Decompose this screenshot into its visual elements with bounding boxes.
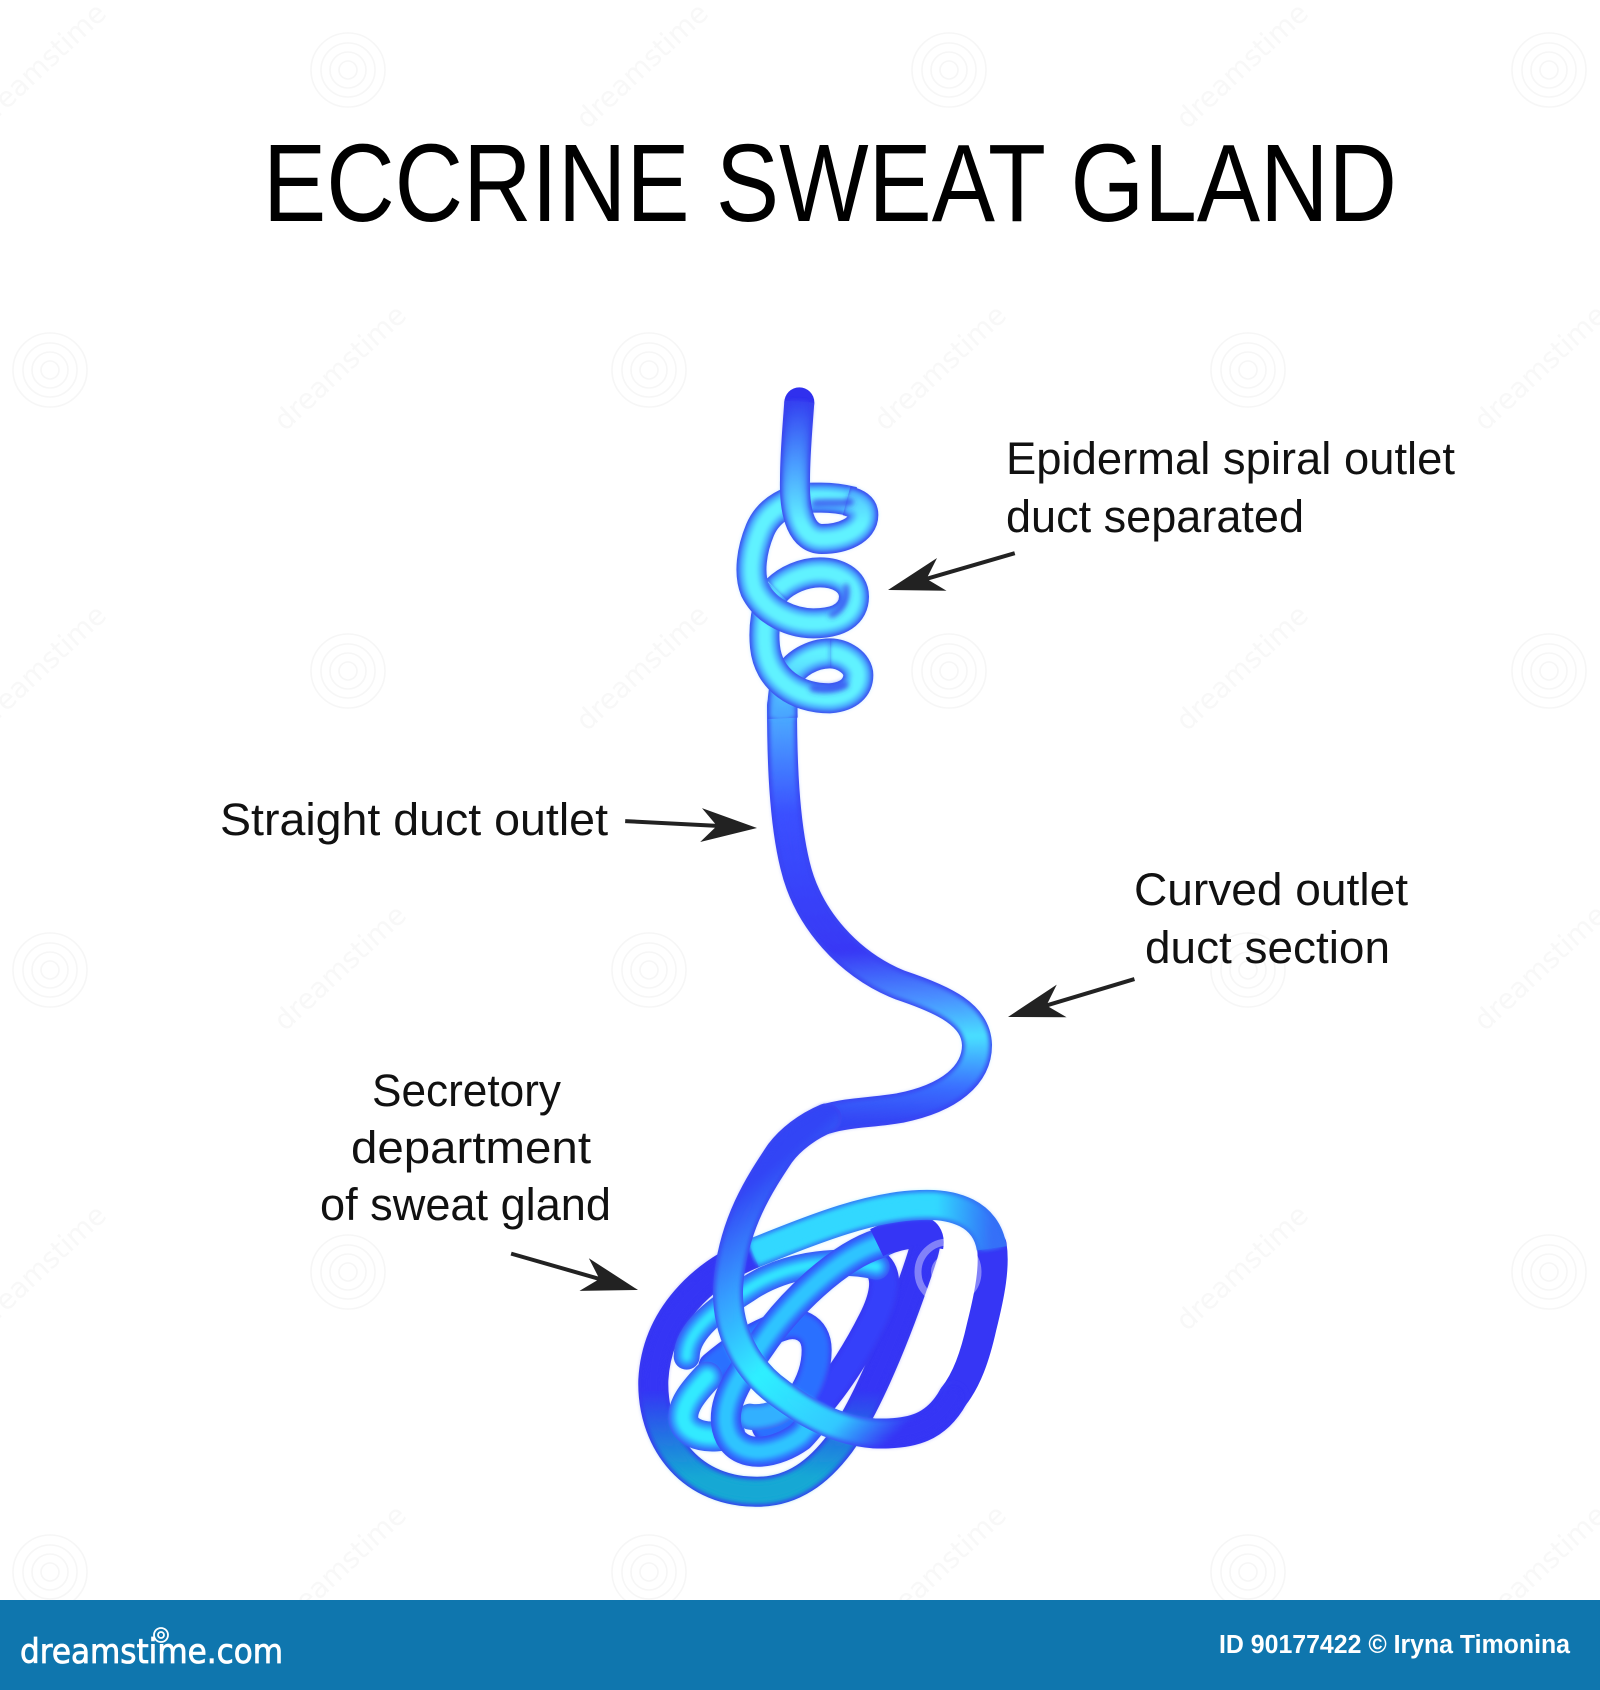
title: ECCRINE SWEAT GLAND (263, 122, 1397, 245)
sweat gland tube illustration (653, 387, 993, 1492)
top straight and first ring (784, 387, 863, 539)
arrow: to curved section (1003, 963, 1139, 1033)
watermark pattern: dreamstime (267, 898, 413, 1037)
footer credit: ID 90177422 © Iryna Timonina (1219, 1631, 1571, 1659)
right dark band (953, 1245, 993, 1397)
label: curved outlet duct section: Curved outlet (1134, 864, 1409, 915)
arrow: to straight duct (624, 804, 758, 845)
footer logo spiral (154, 1628, 168, 1642)
watermark pattern: dreamstime (867, 298, 1013, 437)
watermark pattern: dreamstime (267, 298, 413, 437)
second ring (751, 498, 854, 623)
watermark pattern: dreamstime (1169, 0, 1315, 135)
small ring (713, 1324, 817, 1427)
overlay watermark (918, 1242, 978, 1302)
label: secretory department: Secretory (372, 1065, 561, 1116)
watermark pattern: dreamstime (1169, 598, 1315, 737)
third ring (764, 590, 858, 698)
inner loop light left (687, 1263, 877, 1357)
label: curved outlet duct section: duct section (1145, 922, 1390, 973)
label: epidermal spiral outlet duct: Epidermal spiral outlet (1006, 433, 1455, 484)
label: secretory department: department (351, 1122, 592, 1173)
top light band (753, 1205, 992, 1253)
watermark pattern: dreamstime (569, 0, 715, 135)
footer logo text: dreamstime.com (20, 1632, 283, 1672)
main descending tube and bottom band (728, 1118, 953, 1434)
inner loop dark right (817, 1265, 884, 1407)
label: secretory department: of sweat gland (320, 1179, 611, 1230)
footer bar (0, 1600, 1600, 1690)
label: epidermal spiral outlet duct (1006, 433, 1455, 542)
secretory coil (653, 1118, 993, 1492)
straight and curved duct (782, 705, 977, 1119)
dark cap piece (877, 1230, 929, 1247)
label: secretory department (320, 1065, 611, 1230)
watermark pattern: dreamstime (867, 1498, 1013, 1637)
watermark pattern: dreamstime (569, 598, 715, 737)
epidermal spiral coil (751, 387, 863, 718)
label: straight duct outlet: Straight duct outlet (220, 794, 609, 845)
inner shading (813, 502, 850, 689)
central light tube (726, 1243, 880, 1452)
watermark pattern: dreamstime (267, 1498, 413, 1637)
outer back loop (653, 1233, 925, 1492)
arrow: to secretory coil (506, 1237, 643, 1306)
label: curved outlet duct section (1134, 864, 1409, 973)
stem below coil (782, 653, 830, 718)
watermark pattern: dreamstime (1169, 1198, 1315, 1337)
lower left curl (683, 1377, 730, 1437)
arrow: to spiral duct (883, 537, 1020, 606)
label: epidermal spiral outlet duct: duct separated (1006, 491, 1304, 542)
inner small piece (750, 1408, 783, 1417)
